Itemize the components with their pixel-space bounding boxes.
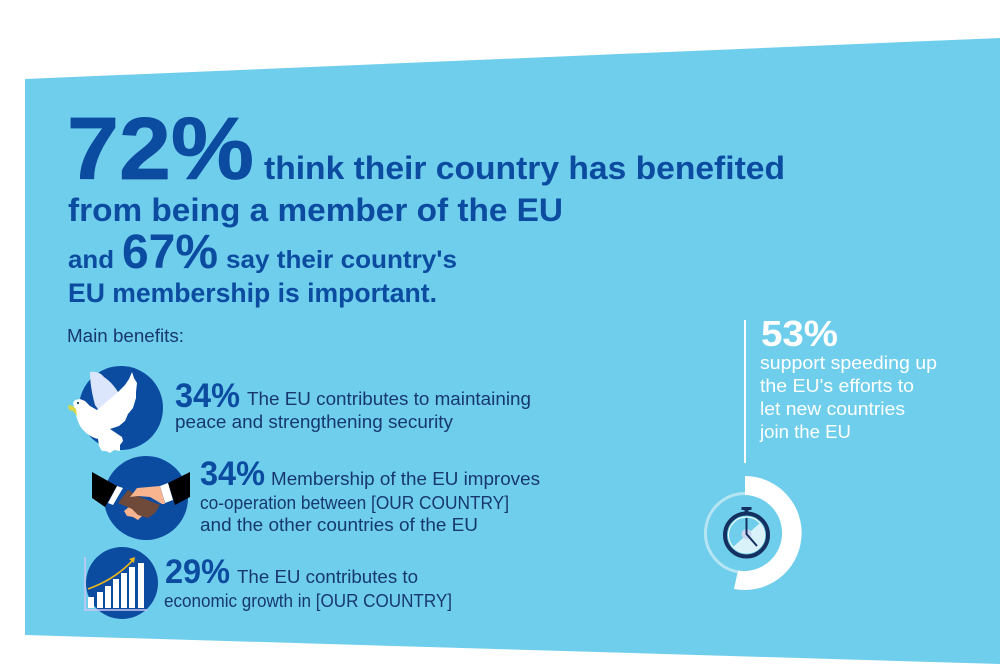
text: benefit 3: economic growth in [OUR COUNTRY] — [164, 591, 452, 611]
text: benefit 2: 34% — [200, 455, 265, 493]
headline: 67% — [122, 226, 218, 279]
text: benefit 1: 34% — [175, 377, 240, 415]
text: benefit 1: The EU contributes to maintaining — [247, 389, 531, 409]
callout: 53%: support speeding up — [760, 353, 937, 373]
text: benefit 3: 29% — [165, 553, 230, 591]
headline: think their country has benefited — [264, 150, 785, 186]
text: benefit 2: and the other countries of the EU — [200, 515, 478, 535]
text: benefit 2: co-operation between [OUR COUNTRY] — [200, 493, 509, 513]
headline — [67, 99, 785, 308]
callout: 53%: join the EU — [759, 422, 851, 442]
subheading: main benefits: Main benefits: — [67, 326, 184, 346]
icon: handshake — [92, 456, 190, 540]
headline: say their country's — [226, 246, 457, 274]
callout: 53%: 53% — [761, 313, 838, 354]
divider: vertical line — [744, 320, 746, 463]
text: benefit 1 — [175, 377, 531, 432]
donut chart with stopwatch — [706, 476, 802, 590]
headline: from being a member of the EU — [68, 192, 563, 228]
headline: 72% — [67, 99, 254, 198]
callout: 53%: let new countries — [760, 399, 905, 419]
icon: bar chart — [85, 547, 158, 619]
headline: EU membership is important. — [68, 278, 437, 308]
callout: 53% — [759, 313, 937, 442]
text: benefit 3 — [164, 553, 452, 611]
icon: dove — [68, 366, 163, 453]
text: benefit 2 — [200, 455, 540, 535]
text: benefit 3: The EU contributes to — [237, 567, 418, 587]
headline: and — [68, 246, 114, 274]
text: benefit 2: Membership of the EU improves — [271, 469, 540, 489]
text: benefit 1: peace and strengthening security — [175, 412, 453, 432]
callout: 53%: the EU's efforts to — [760, 376, 914, 396]
